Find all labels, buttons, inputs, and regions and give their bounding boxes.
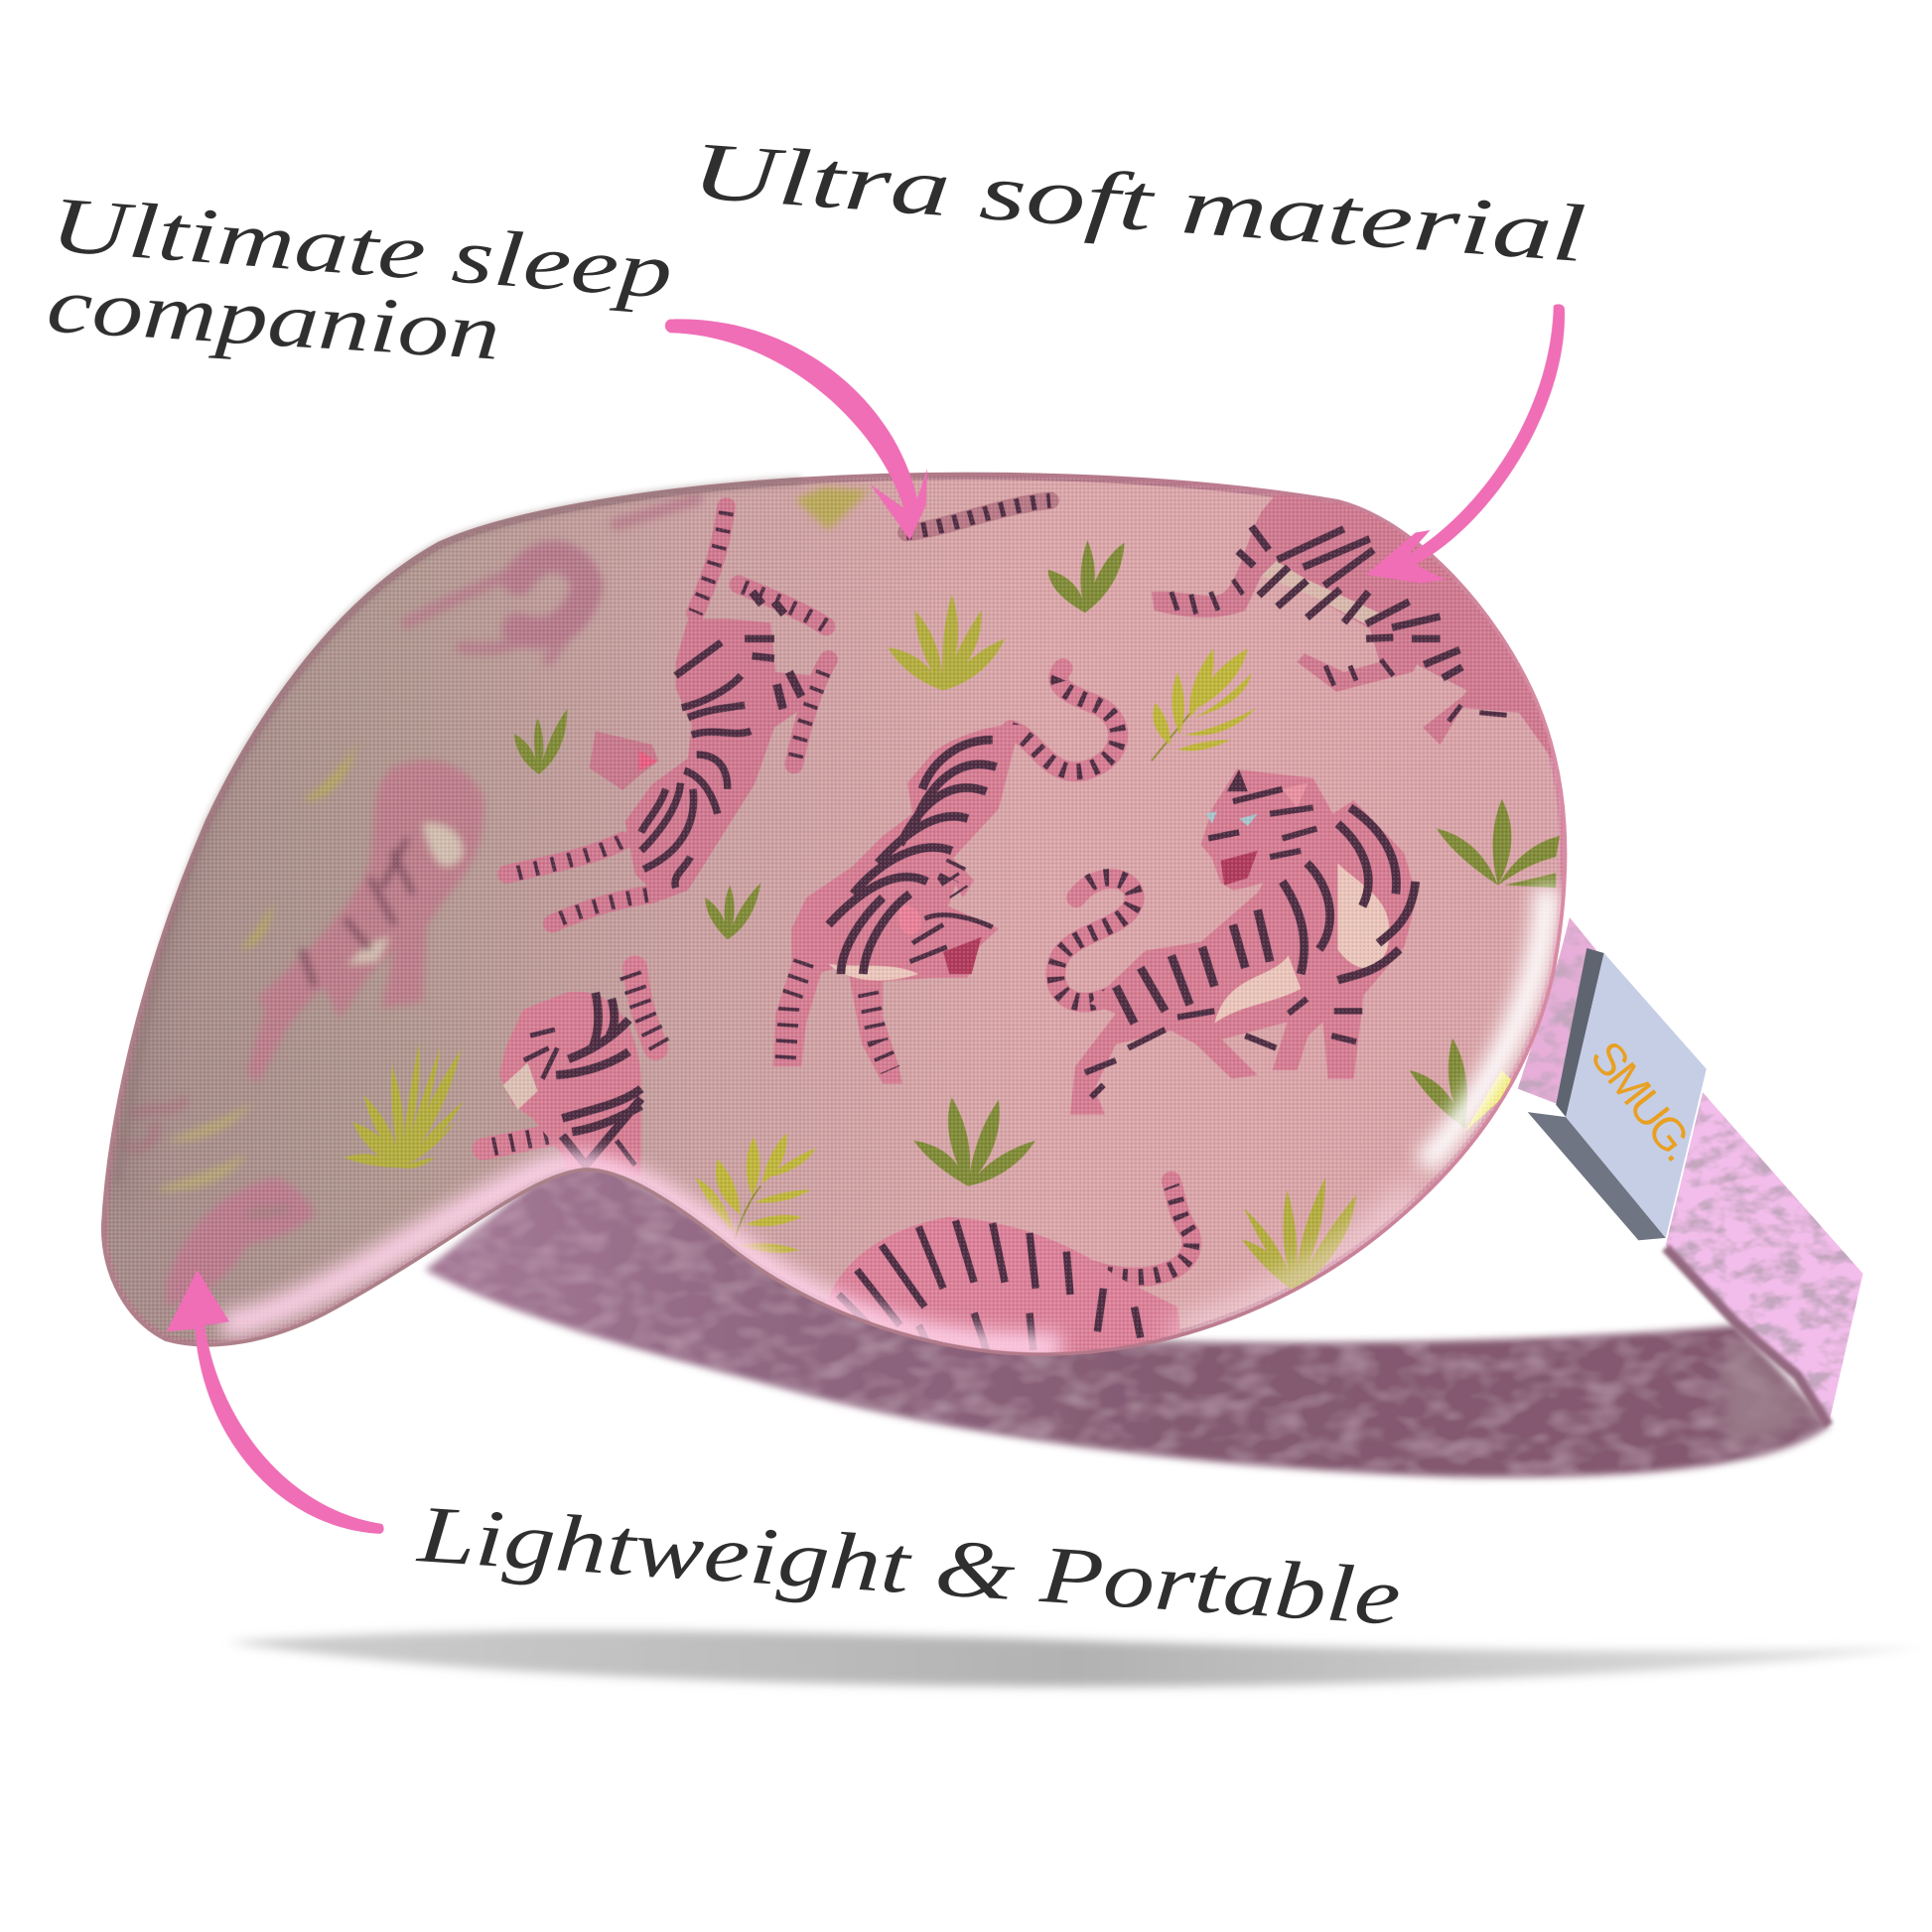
tiger: bottom xyxy=(819,1181,1191,1362)
dark green tufts xyxy=(514,540,1560,1186)
callout text: lightweight and portable: Lightweight & Portable xyxy=(414,1488,1403,1642)
tail xyxy=(1011,668,1118,771)
strap lower section xyxy=(1666,1092,1863,1426)
blurred rim top left xyxy=(117,481,801,1183)
nose xyxy=(638,750,657,770)
tail xyxy=(1091,1181,1191,1277)
strap inner sheen xyxy=(1723,1341,1803,1444)
tiger: lower left crouching xyxy=(483,968,659,1177)
infographic canvas xyxy=(50,145,1880,1693)
loop top edge xyxy=(1556,948,1604,1117)
chest xyxy=(829,964,918,981)
leaf tufts xyxy=(344,540,1560,1292)
arrow: to top of mask xyxy=(665,319,927,540)
tail tip at top of mask xyxy=(906,500,1050,532)
raised paw and foreleg xyxy=(483,968,659,1149)
edge sheen xyxy=(117,666,1548,1347)
belly xyxy=(1214,863,1390,1024)
body xyxy=(819,1217,1183,1362)
mask rim xyxy=(105,476,1564,1352)
belly xyxy=(1261,561,1387,626)
tiger: upper left leaping xyxy=(506,506,829,923)
tail, raised leg and forelegs xyxy=(506,506,829,923)
blurred tigers on left xyxy=(118,487,870,1307)
ear xyxy=(898,905,921,935)
ears xyxy=(1227,769,1248,791)
stripes xyxy=(838,1220,1141,1350)
stripes xyxy=(1172,526,1507,721)
line two: companion xyxy=(45,261,502,376)
stripes xyxy=(641,592,801,888)
tail xyxy=(1055,878,1135,1003)
callout text: ultimate sleep companion xyxy=(45,181,675,376)
sleep mask xyxy=(98,469,1579,1362)
ground shadow xyxy=(228,1630,1923,1687)
body, legs and head xyxy=(773,725,1020,1084)
stripes xyxy=(1085,789,1416,1097)
mouth xyxy=(943,937,982,974)
strap label loop xyxy=(1528,948,1707,1240)
brand logo: SMUG. xyxy=(1581,1032,1704,1169)
head xyxy=(1201,769,1332,891)
palm frond lower xyxy=(695,1133,816,1253)
body xyxy=(625,619,814,900)
tiger: top right xyxy=(1152,487,1579,764)
blurred leaves xyxy=(240,740,357,949)
body xyxy=(1070,778,1417,1115)
blurred bottom tiger xyxy=(167,1177,315,1307)
mask print clipped to outline xyxy=(98,469,1579,1362)
blurred standing tiger xyxy=(246,759,484,1084)
body and head xyxy=(499,992,641,1177)
mouth xyxy=(1220,851,1258,886)
fabric weave texture xyxy=(98,469,1579,1356)
loop face xyxy=(1566,953,1707,1238)
palm frond upper xyxy=(1152,648,1256,760)
arrow: to lower left of mask xyxy=(167,1270,384,1534)
body xyxy=(1152,487,1579,764)
stripes xyxy=(524,993,641,1166)
blurred top tiger xyxy=(407,499,697,659)
yellow-green tufts xyxy=(344,595,1516,1292)
tiger: leaping centre xyxy=(773,668,1118,1084)
stripes xyxy=(829,740,996,974)
line one: Ultimate sleep xyxy=(48,181,675,316)
muzzle xyxy=(503,1062,537,1110)
loop side xyxy=(1528,1112,1666,1240)
head xyxy=(590,731,658,790)
callout text: ultra soft material: Ultra soft material xyxy=(689,125,1588,279)
tiger: standing right xyxy=(1055,769,1417,1115)
arrow: to right of mask xyxy=(1366,304,1565,583)
strap upper section xyxy=(1518,917,1596,1107)
leg stripes xyxy=(785,863,959,1070)
back strap xyxy=(425,1147,1830,1477)
strap lower edge xyxy=(1666,1248,1829,1426)
eyes xyxy=(1206,811,1258,826)
